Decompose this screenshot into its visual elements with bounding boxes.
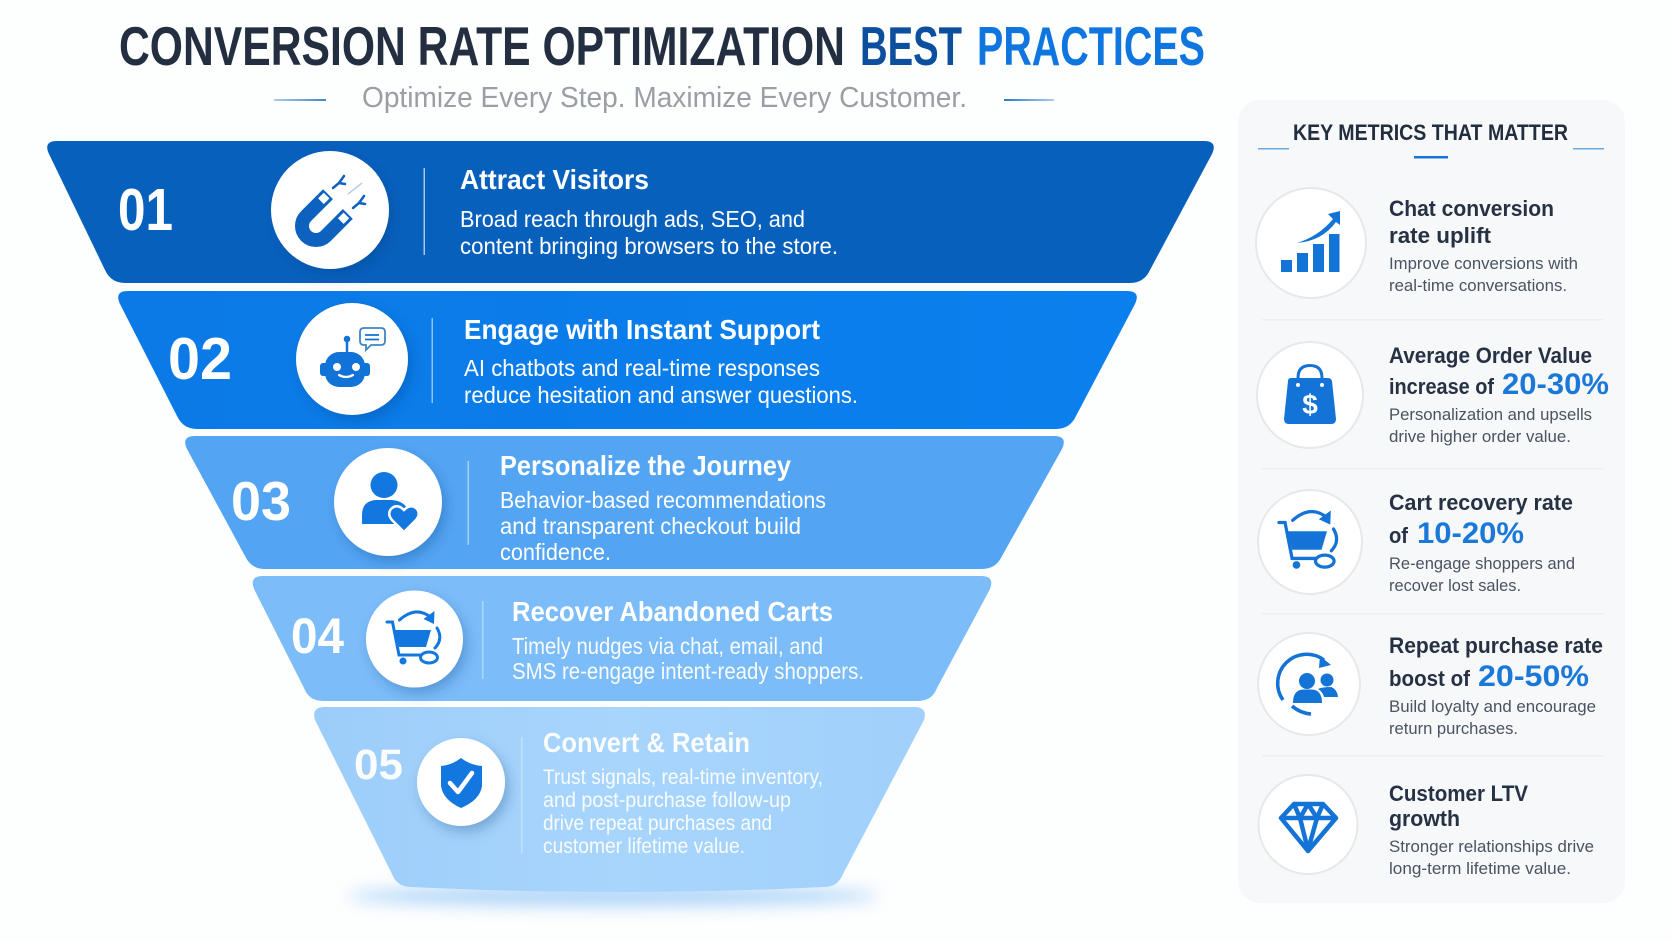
stage number 01: 01 bbox=[118, 177, 173, 243]
funnel stage 4: Recover Abandoned Carts bbox=[253, 576, 991, 701]
metric 2: average order value: drive higher order value. bbox=[1389, 427, 1571, 446]
metric 3: cart recovery: recover lost sales. bbox=[1389, 576, 1521, 595]
stage 4 description bbox=[512, 633, 864, 684]
icon: shopping bag: $ bbox=[1302, 389, 1318, 420]
icon: diamond bbox=[1258, 775, 1358, 874]
stage 5 description: customer lifetime value. bbox=[543, 835, 745, 858]
metric 5: customer LTV bbox=[1258, 775, 1594, 878]
metric 4: repeat purchase: return purchases. bbox=[1389, 719, 1518, 738]
stage number 03: 03 bbox=[231, 470, 291, 532]
metric 2: average order value: increase of bbox=[1389, 374, 1495, 399]
funnel stage 5: Convert & Retain bbox=[314, 707, 925, 892]
stage 5 description bbox=[543, 766, 823, 858]
icon: shopping bag bbox=[1257, 342, 1363, 448]
metric 5: customer LTV: Stronger relationships drive bbox=[1389, 837, 1594, 856]
metric 2: average order value bbox=[1257, 342, 1609, 448]
stage 4 heading: Recover Abandoned Carts bbox=[512, 596, 833, 627]
metric 5: customer LTV: long-term lifetime value. bbox=[1389, 859, 1571, 878]
icon: shield check bbox=[417, 738, 505, 826]
metric 1: chat conversion: real-time conversations. bbox=[1389, 276, 1567, 295]
metric 3: cart recovery: Re-engage shoppers and bbox=[1389, 554, 1575, 573]
stage 5 description: Trust signals, real-time inventory, bbox=[543, 766, 823, 789]
icon: chatbot bbox=[296, 303, 408, 415]
metric 2: average order value: 20-30% bbox=[1502, 368, 1609, 401]
metric 1: chat conversion bbox=[1256, 188, 1578, 298]
icon: rising bar chart bbox=[1256, 188, 1366, 298]
metric 3: cart recovery: Cart recovery rate bbox=[1389, 490, 1573, 515]
title: CONVERSION RATE OPTIMIZATION bbox=[119, 15, 845, 77]
funnel stage 1: Attract Visitors bbox=[47, 141, 1214, 283]
stage 3 description: and transparent checkout build bbox=[500, 513, 801, 539]
stage 1 description: Broad reach through ads, SEO, and bbox=[460, 206, 805, 232]
stage 2 description: AI chatbots and real-time responses bbox=[464, 355, 820, 381]
metric 5: customer LTV: growth bbox=[1389, 806, 1460, 831]
stage 3 description: Behavior-based recommendations bbox=[500, 487, 826, 513]
metric 3: cart recovery: of bbox=[1389, 523, 1409, 548]
stage 4 description: Timely nudges via chat, email, and bbox=[512, 633, 823, 659]
stage number 04: 04 bbox=[291, 608, 344, 664]
icon: person with heart bbox=[334, 448, 442, 556]
stage 2 description bbox=[464, 355, 858, 408]
metric 3: cart recovery: 10-20% bbox=[1417, 517, 1524, 550]
stage 5 heading: Convert & Retain bbox=[543, 727, 750, 758]
metric 1: chat conversion: rate uplift bbox=[1389, 223, 1492, 248]
stage 2 heading: Engage with Instant Support bbox=[464, 314, 820, 345]
funnel base shadow bbox=[348, 886, 878, 906]
metric 1: chat conversion: Chat conversion bbox=[1389, 196, 1554, 221]
panel: key metrics bbox=[1238, 100, 1625, 903]
stage 3 heading: Personalize the Journey bbox=[500, 450, 791, 481]
metric 4: repeat purchase: 20-50% bbox=[1478, 660, 1589, 693]
metric 3: cart recovery bbox=[1258, 490, 1575, 595]
stage 5 description: drive repeat purchases and bbox=[543, 812, 772, 835]
metric 5: customer LTV: Customer LTV bbox=[1389, 781, 1528, 806]
title: BEST bbox=[860, 15, 962, 77]
stage 2 description: reduce hesitation and answer questions. bbox=[464, 382, 858, 408]
metric 4: repeat purchase bbox=[1258, 633, 1603, 738]
icon: magnet bbox=[271, 151, 389, 269]
metric 2: average order value: Personalization and upsells bbox=[1389, 405, 1592, 424]
icon: cart recovery bbox=[1258, 490, 1362, 594]
icon: cart recovery bbox=[366, 590, 463, 688]
stage 1 description: content bringing browsers to the store. bbox=[460, 233, 838, 259]
stage number 02: 02 bbox=[168, 326, 232, 392]
stage 3 description bbox=[500, 487, 826, 565]
icon: returning customers bbox=[1258, 633, 1360, 735]
stage 3 description: confidence. bbox=[500, 539, 611, 565]
funnel stage 2: Engage with Instant Support bbox=[118, 291, 1137, 429]
metric 4: repeat purchase: Build loyalty and encourage bbox=[1389, 697, 1596, 716]
metric 4: repeat purchase: boost of bbox=[1389, 666, 1471, 691]
stage 1 description bbox=[460, 206, 838, 259]
panel heading: KEY METRICS THAT MATTER bbox=[1293, 120, 1568, 145]
stage 4 description: SMS re-engage intent-ready shoppers. bbox=[512, 658, 864, 684]
stage 5 description: and post-purchase follow-up bbox=[543, 789, 791, 812]
metric 2: average order value: Average Order Value bbox=[1389, 343, 1592, 368]
stage number 05: 05 bbox=[354, 741, 403, 789]
funnel stage 3: Personalize the Journey bbox=[185, 436, 1064, 569]
title: PRACTICES bbox=[977, 15, 1205, 77]
metric 4: repeat purchase: Repeat purchase rate bbox=[1389, 633, 1603, 658]
subtitle: Optimize Every Step. Maximize Every Customer. bbox=[362, 82, 967, 114]
metric 1: chat conversion: Improve conversions with bbox=[1389, 254, 1578, 273]
stage 1 heading: Attract Visitors bbox=[460, 164, 649, 195]
